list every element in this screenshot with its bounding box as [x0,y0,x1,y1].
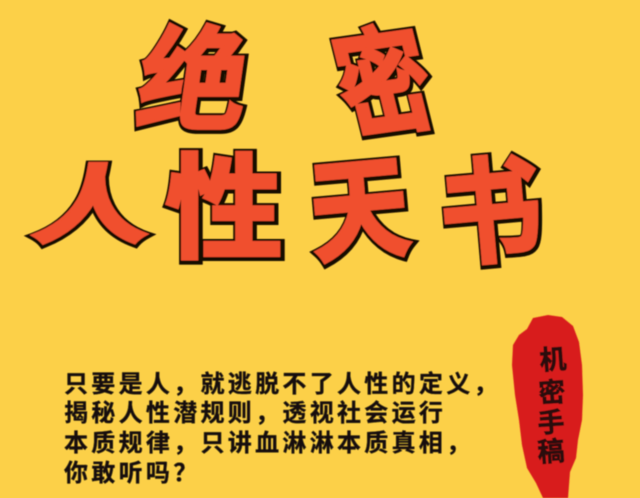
title character 书: 书 [434,146,547,283]
title character 天: 天 [304,146,415,279]
title character 密: 密 [324,16,447,156]
description text block: 揭秘人性潜规则，透视社会运行 [64,393,446,428]
title character 性: 性 [165,146,283,274]
title character 性: 性 [166,147,284,275]
title character 人: 人 [26,159,160,255]
description text block: 本质规律，只讲血淋淋本质真相， [64,423,474,458]
seal vertical text: 密 [537,376,567,409]
seal vertical text: 稿 [536,436,566,468]
title character 绝: 绝 [131,20,258,145]
title character 绝: 绝 [130,19,257,144]
title: 绝密人性天书 [26,15,548,284]
title character 密: 密 [323,15,446,155]
seal shape [512,315,583,498]
description text block [64,364,501,488]
title character 人: 人 [27,160,160,256]
seal vertical text: 机 [538,344,568,376]
seal vertical text [536,344,568,468]
description text block: 只要是人，就逃脱不了人性的定义， [64,364,501,399]
description text block: 你敢听吗？ [64,453,200,488]
title character 天: 天 [306,147,416,280]
seal vertical text: 手 [536,407,566,439]
red seal stamp: 机密手稿 [512,315,583,498]
title character 书: 书 [435,147,548,284]
